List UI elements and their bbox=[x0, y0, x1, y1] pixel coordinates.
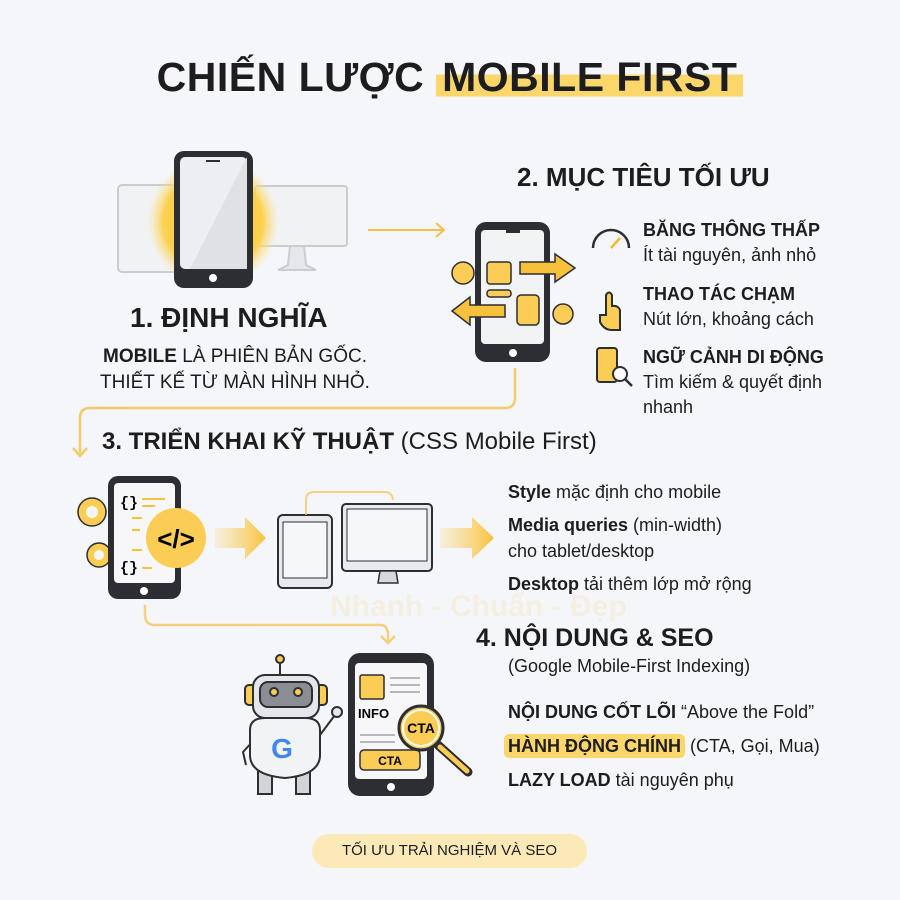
text: implementation: Style mặc định cho mobile bbox=[508, 482, 721, 502]
icon: code phone: {} bbox=[120, 560, 138, 577]
heading: 2 objectives: 2. MỤC TIÊU TỐI ƯU bbox=[517, 162, 770, 192]
icon: CTA phone with magnifier: CTA bbox=[407, 720, 435, 736]
icon: search phone bbox=[597, 348, 632, 386]
list: objectives: THAO TÁC CHẠM bbox=[643, 284, 795, 304]
text: definition bbox=[100, 344, 370, 393]
icon: code phone: </> bbox=[157, 524, 195, 554]
arrow: code to devices bbox=[215, 517, 266, 559]
arrow: 2 to 3 connector bbox=[73, 368, 515, 456]
text: implementation: cho tablet/desktop bbox=[508, 541, 654, 561]
text: implementation: Media queries (min-width) bbox=[508, 515, 722, 535]
text: implementation bbox=[508, 482, 752, 594]
text: implementation: Desktop tải thêm lớp mở rộng bbox=[508, 574, 752, 594]
list: seo: LAZY LOAD tài nguyên phụ bbox=[508, 770, 734, 790]
arrow: 1 to 2 bbox=[368, 223, 444, 237]
list: objectives bbox=[643, 219, 824, 417]
icon: devices definition bbox=[118, 151, 347, 288]
icon: phone objective bbox=[452, 222, 575, 362]
list: seo: NỘI DUNG CỐT LÕI “Above the Fold” bbox=[508, 702, 814, 722]
watermark: Nhanh - Chuẩn - Đẹp bbox=[330, 590, 627, 623]
heading: 3 implementation: 3. TRIỂN KHAI KỸ THUẬT (CSS Mobile First) bbox=[102, 428, 597, 455]
icon: google robot bbox=[243, 655, 342, 794]
list: objectives: NGỮ CẢNH DI ĐỘNG bbox=[643, 347, 824, 367]
list: objectives: Nút lớn, khoảng cách bbox=[643, 309, 814, 329]
icon: code phone: {} bbox=[120, 495, 138, 512]
icon: touch bbox=[600, 292, 620, 330]
list: objectives: nhanh bbox=[643, 397, 693, 417]
footer pill: TỐI ƯU TRẢI NGHIỆM VÀ SEO bbox=[342, 842, 557, 859]
icon: code phone bbox=[78, 476, 206, 599]
list: seo: HÀNH ĐỘNG CHÍNH (CTA, Gọi, Mua) bbox=[508, 736, 820, 756]
text: seo subtitle: (Google Mobile-First Indexing) bbox=[508, 656, 750, 676]
icon: google robot: G bbox=[271, 733, 293, 764]
icon: CTA phone with magnifier: CTA bbox=[378, 754, 402, 768]
arrow: 3 to 4 connector bbox=[145, 605, 395, 643]
list: objectives: BĂNG THÔNG THẤP bbox=[643, 220, 820, 240]
heading: 1 definition: 1. ĐỊNH NGHĨA bbox=[130, 302, 328, 333]
text: definition: THIẾT KẾ TỪ MÀN HÌNH NHỎ. bbox=[100, 372, 370, 393]
list: objectives: Tìm kiếm & quyết định bbox=[643, 372, 822, 392]
text: definition: MOBILE LÀ PHIÊN BẢN GỐC. bbox=[103, 346, 367, 367]
icon: CTA phone with magnifier: INFO bbox=[358, 706, 389, 721]
title: CHIẾN LƯỢC MOBILE FIRST bbox=[157, 54, 737, 100]
list: seo bbox=[504, 701, 820, 790]
heading: 4 content seo: 4. NỘI DUNG & SEO bbox=[476, 624, 714, 652]
icon: gauge bbox=[593, 230, 629, 248]
icon: tablet and desktop bbox=[278, 492, 432, 588]
arrow: devices to text bbox=[440, 517, 494, 559]
footer pill bbox=[312, 834, 587, 868]
icon: CTA phone with magnifier bbox=[348, 653, 468, 796]
list: objectives: Ít tài nguyên, ảnh nhỏ bbox=[643, 245, 816, 265]
